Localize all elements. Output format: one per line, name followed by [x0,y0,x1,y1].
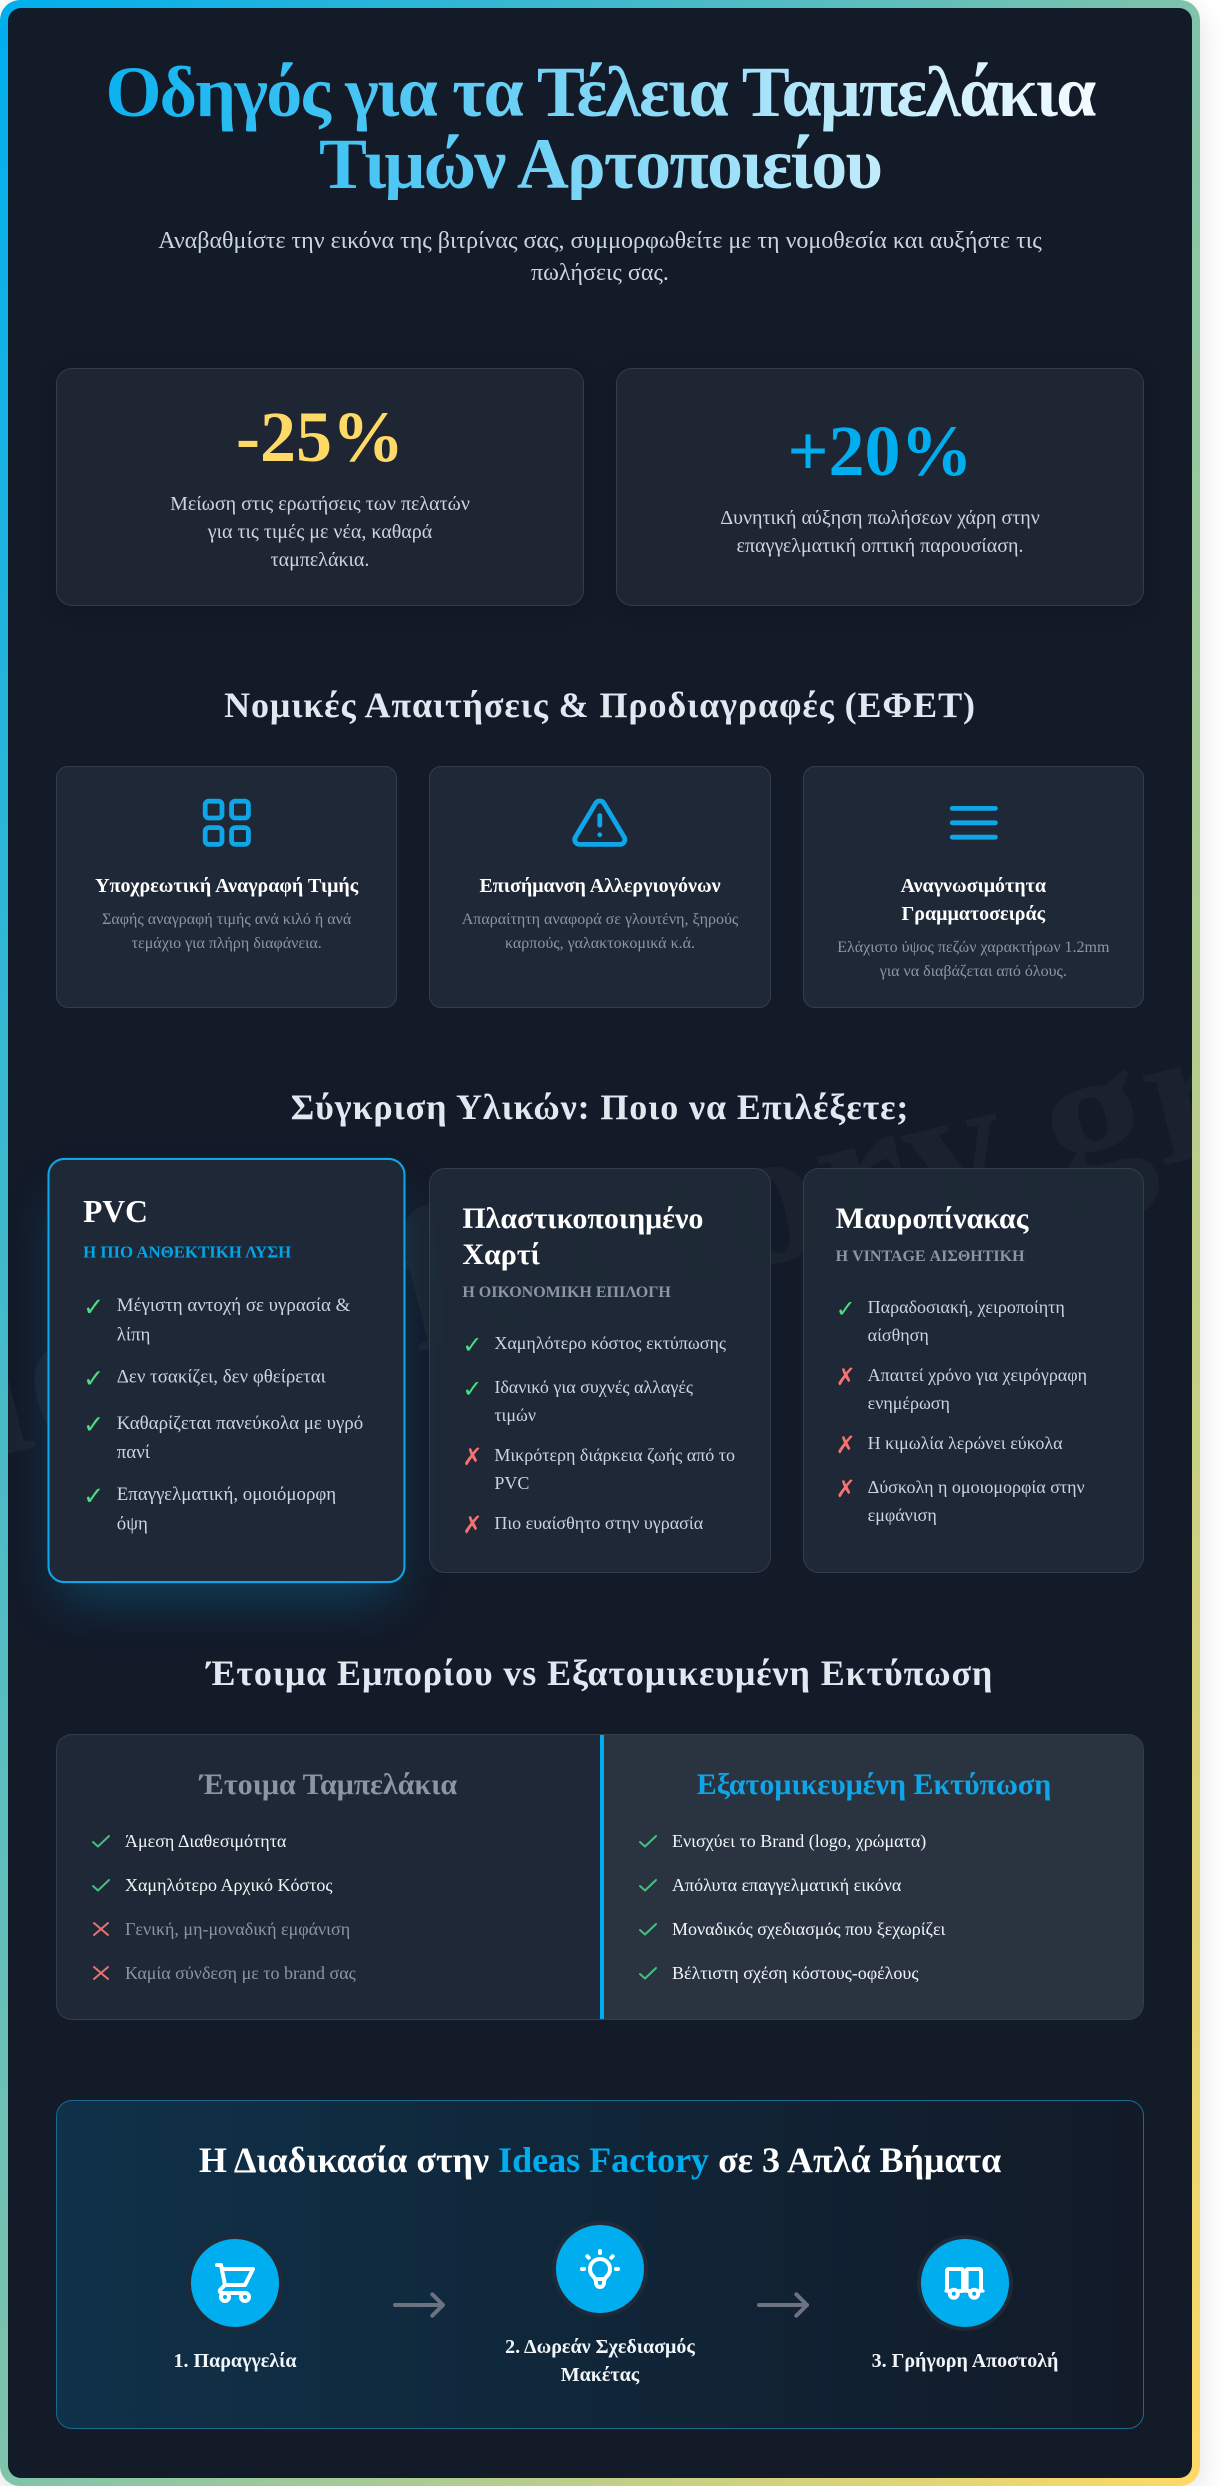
feature list: Επαγγελματική, ομοιόμορφη [117,1483,336,1504]
row: Βέλτιστη σχέση κόστους-οφέλους [672,1963,918,1983]
step 2 icon [552,2221,648,2317]
stat number: +20% [787,411,973,491]
step 3 label: 3. Γρήγορη Αποστολή [872,2350,1058,2372]
feature list: Μέγιστη αντοχή σε υγρασία & [117,1294,350,1315]
stat description: Δυνητική αύξηση πωλήσεων χάρη στην [720,507,1040,529]
card title [900,875,1046,925]
stat description [170,493,470,571]
feature list: Χαμηλότερο κόστος εκτύπωσης [494,1333,726,1353]
stat description: επαγγελματική οπτική παρουσίαση. [737,535,1023,557]
card text [102,911,351,952]
material name: Πλαστικοποιημένο [462,1202,703,1235]
material name: Μαυροπίνακας [836,1202,1028,1235]
step 2 label [505,2336,695,2386]
card title: Αναγνωσιμότητα [901,875,1046,897]
feature list: ✓ [462,1375,482,1403]
panel: stat -25% [56,368,584,606]
row: Γενική, μη-μοναδική εμφάνιση [125,1919,350,1939]
panel: laminated paper [429,1168,771,1573]
column title: Έτοιμα Ταμπελάκια [200,1768,457,1801]
feature list: ✓ [462,1331,482,1359]
row: Καμία σύνδεση με το brand σας [125,1963,356,1983]
feature list: ✓ [83,1410,104,1439]
feature list: ✗ [462,1511,482,1539]
panel: process [56,2100,1144,2429]
column title: Εξατομικευμένη Εκτύπωση [697,1768,1051,1801]
subtitle: Αναβαθμίστε την εικόνα της βιτρίνας σας, συμμορφωθείτε με τη νομοθεσία και αυξήστε τις [158,228,1042,254]
icon: warning [572,798,628,847]
panel: stat +20% [616,368,1144,606]
card text [837,939,1110,980]
card text: για να διαβάζεται από όλους. [880,963,1067,980]
card title: Υποχρεωτική Αναγραφή Τιμής [95,875,358,897]
icon: grid [202,798,251,847]
process heading: Η Διαδικασία στην Ideas Factory σε 3 Απλά Βήματα [199,2140,1001,2180]
feature list: ✓ [836,1295,856,1323]
feature list: Μικρότερη διάρκεια ζωής από το [494,1445,735,1465]
feature list [462,1331,735,1539]
feature list: ✗ [462,1443,482,1471]
feature list: Καθαρίζεται πανεύκολα με υγρό [117,1412,363,1433]
feature list: Δύσκολη η ομοιομορφία στην [868,1477,1085,1497]
stat number: -25% [236,397,404,477]
panel: legibility [803,766,1144,1008]
feature list: ✓ [83,1292,104,1322]
step 2 label: 2. Δωρεάν Σχεδιασμός [505,2336,695,2358]
feature list [83,1292,363,1534]
column: ready signs [92,1768,457,1983]
stat description: Μείωση στις ερωτήσεις των πελατών [170,493,470,515]
subtitle: πωλήσεις σας. [531,260,669,286]
row: Άμεση Διαθεσιμότητα [125,1831,286,1851]
row: Μοναδικός σχεδιασμός που ξεχωρίζει [672,1919,945,1939]
feature list: ενημέρωση [868,1393,950,1413]
feature list: τιμών [494,1405,536,1425]
icon: lines [950,806,998,840]
panel: chalkboard [803,1168,1144,1573]
feature list: πανί [117,1441,150,1462]
title: Τιμών Αρτοποιείου [319,124,881,204]
card text: Σαφής αναγραφή τιμής ανά κιλό ή ανά [102,911,351,928]
feature list: Απαιτεί χρόνο για χειρόγραφη [868,1365,1087,1385]
card title: Επισήμανση Αλλεργιογόνων [479,875,721,897]
feature list: PVC [494,1473,529,1493]
material tag: Η ΟΙΚΟΝΟΜΙΚΗ ΕΠΙΛΟΓΗ [462,1284,671,1301]
heading: ready vs custom: Έτοιμα Εμπορίου vs Εξατομικευμένη Εκτύπωση [207,1653,993,1693]
material tag: Η VINTAGE ΑΙΣΘΗΤΙΚΗ [836,1248,1025,1265]
title [56,56,1144,200]
panel: allergens [429,766,771,1008]
arrow 1 [393,2292,446,2318]
feature list: λίπη [117,1324,150,1345]
subtitle [158,228,1042,286]
feature list: ✓ [83,1481,104,1511]
step 2 label: Μακέτας [561,2364,639,2386]
column: custom print [600,1735,1144,2019]
heading: legal requirements: Νομικές Απαιτήσεις & Προδιαγραφές (ΕΦΕΤ) [224,685,976,725]
card text: Απαραίτητη αναφορά σε γλουτένη, ξηρούς [462,911,738,928]
material name: Χαρτί [462,1238,540,1271]
row: Ενισχύει το Brand (logo, χρώματα) [672,1831,926,1851]
heading: materials: Σύγκριση Υλικών: Ποιο να Επιλέξετε; [291,1087,909,1127]
feature list: αίσθηση [868,1325,929,1345]
feature list: ✗ [836,1431,856,1459]
panel: mandatory price [56,766,397,1008]
feature list: Παραδοσιακή, χειροποίητη [868,1297,1065,1317]
feature list: εμφάνιση [868,1505,937,1525]
feature list: ✗ [836,1363,856,1391]
row: Χαμηλότερο Αρχικό Κόστος [125,1875,333,1895]
row: Απόλυτα επαγγελματική εικόνα [672,1875,901,1895]
panel: comparison table [56,1734,1144,2020]
feature list: ✓ [83,1364,104,1393]
title: Οδηγός για τα Τέλεια Ταμπελάκια [105,52,1095,132]
material tag: Η ΠΙΟ ΑΝΘΕΚΤΙΚΗ ΛΥΣΗ [83,1244,291,1262]
feature list [836,1295,1087,1525]
step 1 label: 1. Παραγγελία [173,2350,297,2372]
feature list: Πιο ευαίσθητο στην υγρασία [494,1513,703,1533]
feature list: Ιδανικό για συχνές αλλαγές [494,1377,693,1397]
step 3 icon [917,2235,1013,2331]
material name [462,1202,703,1271]
stat description: ταμπελάκια. [271,549,369,571]
feature list: ✗ [836,1475,856,1503]
panel: PVC [47,1158,406,1583]
card title: Γραμματοσειράς [902,903,1045,925]
step 1 icon [187,2235,283,2331]
feature list: Η κιμωλία λερώνει εύκολα [868,1433,1063,1453]
card text: τεμάχιο για πλήρη διαφάνεια. [132,935,322,952]
arrow 2 [757,2292,810,2318]
feature list: όψη [117,1513,148,1534]
feature list: Δεν τσακίζει, δεν φθείρεται [117,1366,326,1387]
material name: PVC [83,1195,148,1229]
card text: Ελάχιστο ύψος πεζών χαρακτήρων 1.2mm [837,939,1109,956]
card text: καρπούς, γαλακτοκομικά κ.ά. [505,935,695,952]
stat description [720,507,1040,557]
card text [462,911,738,952]
stat description: για τις τιμές με νέα, καθαρά [208,521,432,543]
